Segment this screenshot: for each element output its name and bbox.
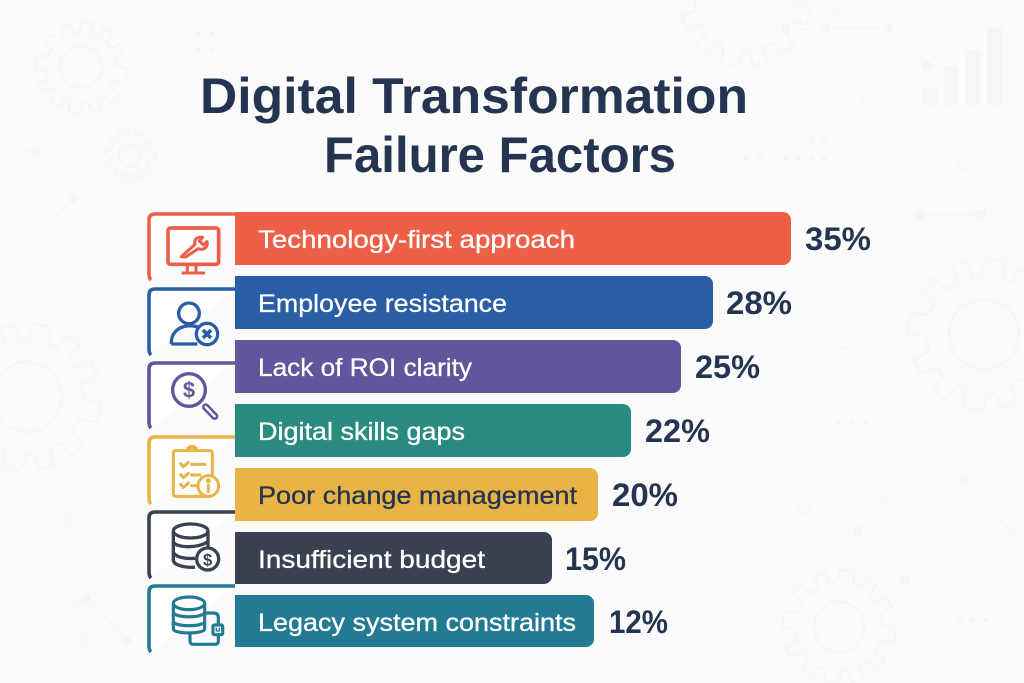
bar label: Digital skills gaps [258,418,465,446]
value: 12% [609,604,668,640]
panel: technology-first approach row [149,212,871,280]
bar label: Poor change management [258,482,577,510]
panel: insufficient budget row [149,512,626,584]
value: 28% [726,285,792,321]
bar label: Insufficient budget [258,546,485,574]
bar label: Technology-first approach [258,226,575,254]
icon: person with x badge [171,303,218,345]
bar: digital skills gaps 22% [235,404,631,457]
icon: monitor with wrench [168,228,219,273]
bar label: Employee resistance [258,290,507,318]
bar label: Legacy system constraints [258,609,576,637]
bar: poor change management 20% [235,468,598,521]
icon: magnifier with dollar: $ [183,378,195,403]
bar: 12% [235,595,594,647]
value: 15% [565,541,626,577]
icon: clipboard checklist with alert [173,446,219,496]
panel: lack of ROI clarity row [149,340,760,428]
bar label: Lack of ROI clarity [258,354,473,382]
icon frame: legacy [149,586,235,652]
bar: 15% [235,532,552,584]
icon: database with dollar [173,524,220,572]
title [200,68,748,183]
icon frame: ROI [149,363,235,428]
icon frame: budget [149,512,235,578]
panel: employee resistance row [149,276,792,355]
icon frame: employee [149,289,235,355]
title: Digital Transformation [200,68,748,124]
value: 25% [695,349,760,385]
icon frame: technology [149,214,235,280]
icon: magnifier with dollar [173,374,215,416]
title: Failure Factors [324,127,676,183]
icon: database with dollar: $ [203,550,213,569]
value: 22% [645,413,710,449]
bar: 35% [235,212,791,265]
bar: 28% [235,276,713,329]
panel: poor change management row frame and digital skills row [149,404,710,521]
value: 20% [612,477,678,513]
icon: database with plug [173,597,223,644]
value: 35% [805,221,871,257]
icon frame: checklist [149,437,235,504]
bar: 25% [235,340,681,393]
panel: legacy system constraints row [149,586,668,652]
